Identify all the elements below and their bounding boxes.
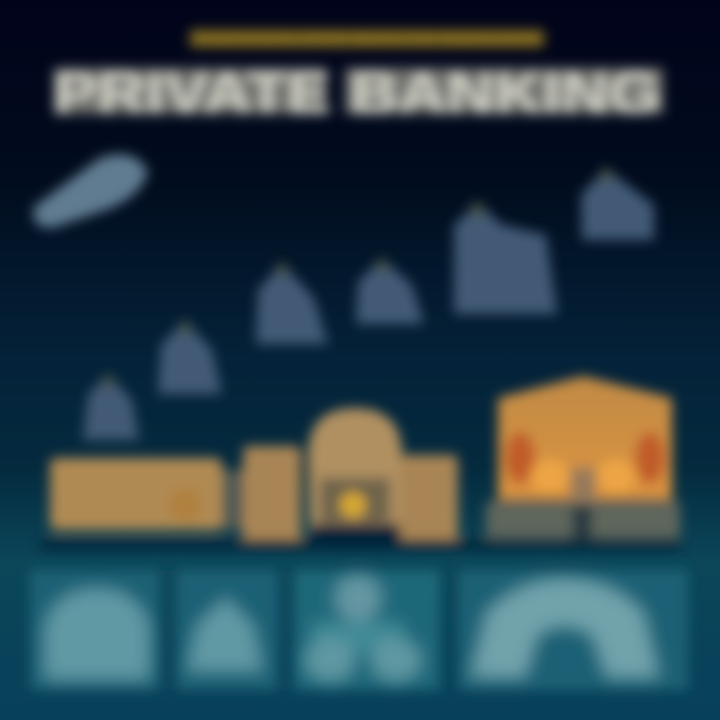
icon: panel 4 [470,578,660,678]
icon: panel 2 [186,596,264,672]
bank building right temple [486,376,680,539]
bank building central dome [308,408,458,550]
chart: rising house icons [83,168,654,440]
kicker line: PERSONALIZED WEALTH SERVICES [194,31,540,47]
icon: panel 1 [44,588,150,680]
icon: marker 5 [454,203,557,314]
bank building left wing [50,446,301,544]
icon: marker 3 [256,263,328,344]
panel icons [44,574,660,682]
icon: panel 3 [334,574,382,622]
ground shadow [40,540,680,550]
icon tips: olive highlights [101,168,613,389]
icon: marker 2 [158,320,222,394]
icon: comet top left [33,154,148,228]
panel band [30,570,688,690]
icon: marker 4 [356,258,424,324]
icon: marker 6 [581,168,654,240]
icon: marker 1 [83,374,139,440]
title: PRIVATE BANKING [53,61,661,126]
